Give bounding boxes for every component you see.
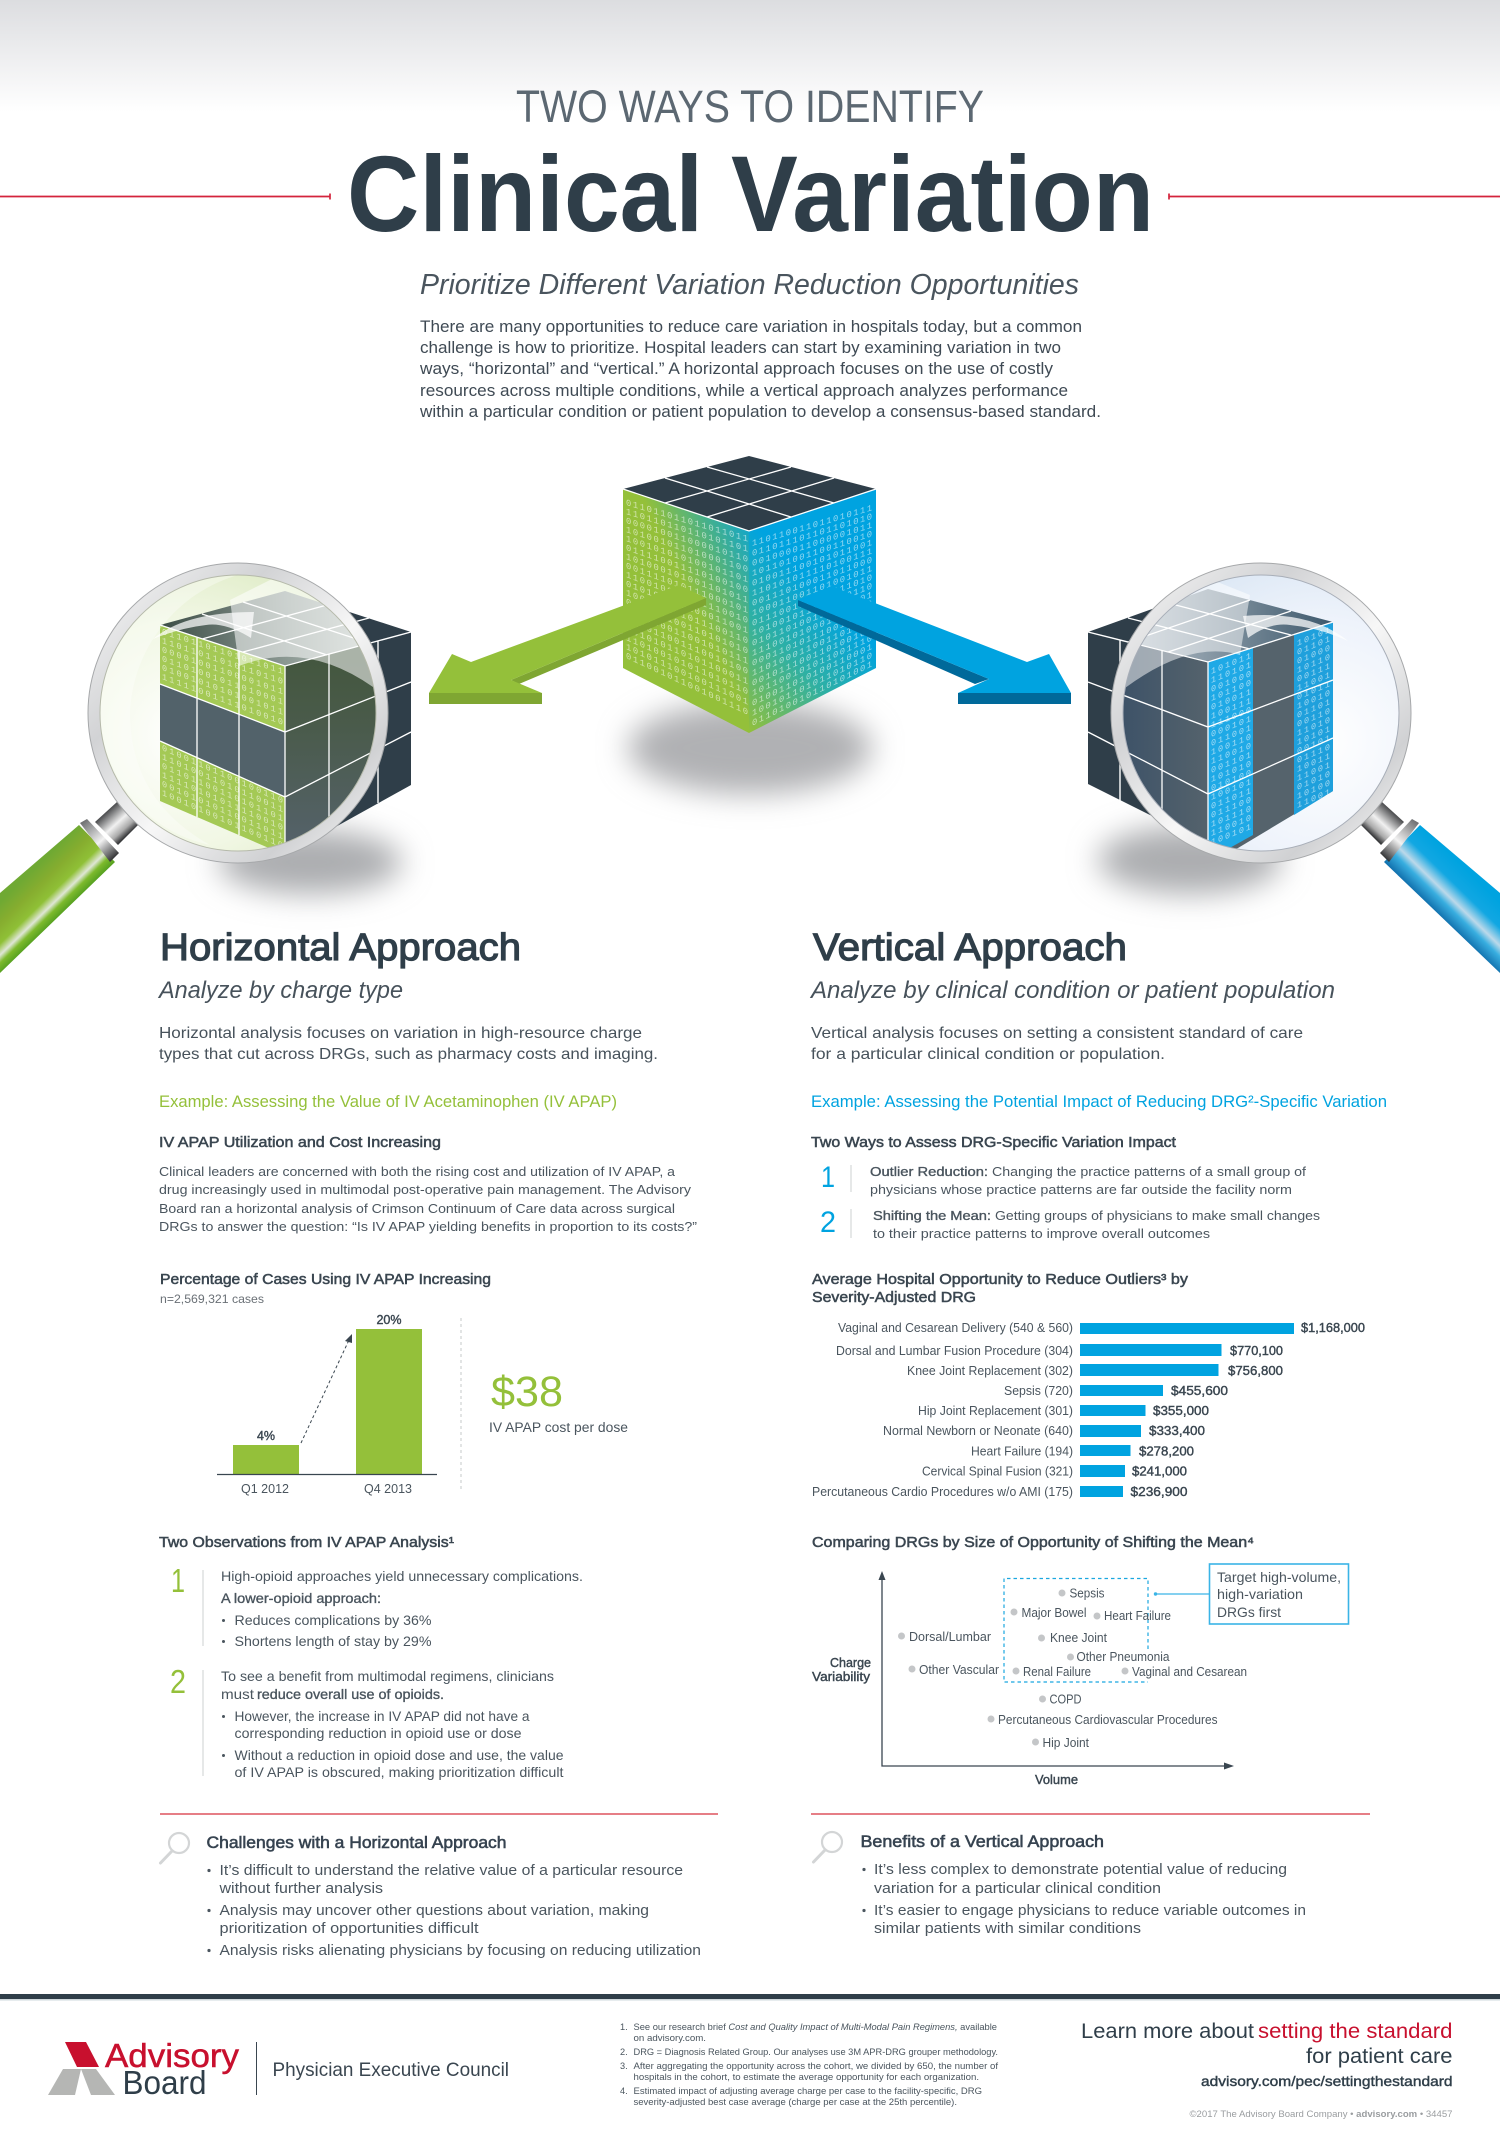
- footnotes: DRG = Diagnosis Related Group. Our analyses use 3M APR-DRG grouper methodology.: [634, 2047, 998, 2057]
- bar row 4: [1004, 1384, 1228, 1398]
- intro paragraph: ways, “horizontal” and “vertical.” A horizontal approach focuses on the use of costly: [419, 360, 1054, 378]
- binary digits strip one: 100101: [1211, 822, 1251, 848]
- description: [811, 1025, 1303, 1063]
- binary digits strip two: 01101: [1297, 697, 1330, 721]
- binary digits left face: 011001011001001110: [626, 650, 748, 718]
- top background gradient: [0, 0, 1500, 112]
- binary digits strip two: 10010: [1297, 688, 1330, 712]
- binary digits top band: 01101001011010001: [162, 654, 283, 707]
- way 1: outlier reduction: physicians whose practice patterns are far outside the facility norm: [870, 1182, 1292, 1197]
- callout connector: [1154, 1592, 1209, 1596]
- observations heading: Two Observations from IV APAP Analysis¹: [159, 1535, 454, 1551]
- intro subtitle: Prioritize Different Variation Reduction Opportunities: [420, 269, 1079, 301]
- footnotes: 1.: [620, 2022, 628, 2032]
- bar row 4: $455,600: [1171, 1384, 1228, 1398]
- binary digits right face: 001110100011011000: [752, 554, 872, 609]
- stat: cost per dose: [489, 1368, 628, 1435]
- scatter labels: Percutaneous Cardiovascular Procedures: [998, 1713, 1218, 1727]
- intro paragraph: resources across multiple conditions, while a vertical approach analyzes performance: [420, 382, 1068, 400]
- binary digits strip two: 01011: [1297, 679, 1330, 703]
- scatter points: [898, 1590, 1128, 1746]
- bar row 9: Percutaneous Cardio Procedures w/o AMI (175): [812, 1485, 1073, 1499]
- bar row 4: Sepsis (720): [1004, 1384, 1073, 1398]
- binary digits strip one: 001101: [1211, 750, 1251, 776]
- lens glare swoosh: [1243, 615, 1348, 641]
- dark cube behind lens: [1088, 589, 1333, 844]
- binary digits top band: 01101101101011011: [162, 627, 283, 677]
- bar row 5: [918, 1404, 1209, 1418]
- scatter labels: Renal Failure: [1023, 1665, 1091, 1679]
- binary digits strip one: 011011: [1211, 786, 1251, 812]
- binary digits right face: 100101101011010110: [752, 650, 872, 719]
- scatter labels: Dorsal/Lumbar: [909, 1630, 991, 1644]
- binary digits bottom band: 01001101100100110: [162, 743, 283, 806]
- binary digits right face: 110100011001101010: [752, 615, 872, 679]
- binary digits strip two: 00101: [1297, 733, 1330, 757]
- panel: vertical approach: [809, 927, 1387, 1787]
- callout box: Target high-volume,: [1217, 1569, 1341, 1585]
- bar row 6: Normal Newborn or Neonate (640): [883, 1424, 1073, 1438]
- binary digits bottom band: 00101010110011011: [162, 779, 283, 842]
- binary digits right face: [752, 503, 873, 729]
- observation 1: High-opioid approaches yield unnecessary complications.: [221, 1568, 583, 1584]
- binary digits left face: 011110011110100100: [626, 542, 748, 595]
- cube top face: [623, 456, 876, 531]
- benefits list: variation for a particular clinical condition: [874, 1881, 1161, 1897]
- lens glass: [1123, 575, 1399, 851]
- right shadow: [1098, 826, 1282, 894]
- scatter chart heading: Comparing DRGs by Size of Opportunity of Shifting the Mean⁴: [812, 1535, 1254, 1551]
- bar row 7: Heart Failure (194): [971, 1444, 1073, 1458]
- binary digits left face: 000010011000010110: [626, 515, 748, 565]
- binary digits strip two: [1297, 625, 1330, 811]
- title kicker: TWO WAYS TO IDENTIFY: [516, 81, 984, 132]
- panel: challenges with a horizontal approach: [160, 1814, 718, 1959]
- description: Vertical analysis focuses on setting a consistent standard of care: [811, 1025, 1303, 1042]
- lens edge glow: [100, 575, 238, 845]
- binary digits left face: [626, 498, 749, 718]
- illustration: central data cube: [623, 456, 876, 794]
- dark cube behind lens: [160, 591, 411, 855]
- observation 2: reduce overall use of opioids.: [257, 1686, 444, 1702]
- way 1: outlier reduction: 1: [821, 1161, 835, 1194]
- scatter chart: DRG opportunity: [812, 1564, 1348, 1787]
- benefits list: [862, 1862, 1306, 1937]
- binary digits right face: 001011100110100101: [752, 624, 872, 689]
- binary digits right face: 110110011011010111: [752, 503, 872, 549]
- call to action: advisory.com/pec/settingthestandard: [1201, 2073, 1452, 2089]
- binary digits strip one: 101011: [1211, 651, 1251, 677]
- magnified cube: [110, 576, 376, 848]
- binary digits strip one: 111000: [1211, 705, 1251, 731]
- icon: magnifier: [160, 1833, 189, 1863]
- bar chart: hospital opportunity: [812, 1272, 1365, 1499]
- binary digits strip two: 10100: [1297, 778, 1330, 802]
- blue strip one: [1208, 648, 1253, 860]
- subsection heading: IV APAP Utilization and Cost Increasing: [159, 1135, 441, 1151]
- bar chart: hospital opportunity: Average Hospital Opportunity to Reduce Outliers³ by: [812, 1272, 1189, 1288]
- bar chart: percentage of cases: Q1 2012: [241, 1482, 289, 1496]
- bar row 3: [907, 1364, 1283, 1378]
- bar row 8: [922, 1464, 1187, 1478]
- intro: [419, 269, 1101, 421]
- intro paragraph: There are many opportunities to reduce care variation in hospitals today, but a common: [420, 318, 1082, 336]
- binary digits bottom band: 01101100110101101: [162, 761, 283, 824]
- bar chart: percentage of cases: 4%: [257, 1429, 275, 1443]
- scatter labels: [909, 1586, 1247, 1750]
- challenges list: Analysis risks alienating physicians by focusing on reducing utilization: [220, 1943, 701, 1959]
- bar row 2: Dorsal and Lumbar Fusion Procedure (304): [836, 1344, 1073, 1358]
- way 1: outlier reduction: [821, 1161, 1306, 1197]
- binary digits strip one: 100101: [1211, 777, 1251, 803]
- binary digits strip two: 11001: [1297, 760, 1330, 784]
- call to action: [1081, 2020, 1452, 2089]
- description: for a particular clinical condition or population.: [811, 1046, 1165, 1063]
- binary digits strip two: 10011: [1297, 751, 1330, 775]
- challenges heading: Challenges with a Horizontal Approach: [206, 1834, 506, 1852]
- way 2: shifting the mean: Getting groups of physicians to make small changes: [995, 1208, 1321, 1223]
- binary digits strip two: 00110: [1297, 706, 1330, 730]
- description: Horizontal analysis focuses on variation in high-resource charge: [159, 1025, 642, 1042]
- binary digits left face: 100110101011100110: [626, 587, 748, 646]
- footnotes: hospitals in the cohort, to estimate the average opportunity for each organization.: [634, 2072, 979, 2082]
- binary digits right face: 111001010001101100: [752, 598, 872, 659]
- binary digits left face: 010101110100011001: [626, 578, 749, 636]
- bar chart: percentage of cases: Percentage of Cases Using IV APAP Increasing: [160, 1272, 491, 1288]
- scatter labels: Sepsis: [1070, 1586, 1104, 1600]
- scatter chart: DRG opportunity: Variability: [812, 1670, 871, 1684]
- binary digits strip one: 001000: [1211, 669, 1251, 695]
- way 2: shifting the mean: 2: [820, 1206, 836, 1239]
- binary digits left face: 110110110110101101: [626, 507, 748, 555]
- lens glare band: [1125, 575, 1250, 688]
- scatter chart: DRG opportunity: Volume: [1035, 1773, 1078, 1787]
- way 2: shifting the mean: to their practice patterns to improve overall outcomes: [873, 1226, 1211, 1241]
- body text: DRGs to answer the question: “Is IV APAP yielding benefits in proportion to its costs?”: [159, 1219, 697, 1234]
- binary digits strip one: 100111: [1211, 696, 1251, 722]
- description: [159, 1025, 658, 1063]
- binary digits strip two: 11001: [1297, 787, 1330, 811]
- subheading: Analyze by charge type: [157, 977, 403, 1004]
- bar chart: percentage of cases: 20%: [376, 1313, 402, 1327]
- binary digits right face: 101100101011001110: [752, 633, 872, 699]
- benefits list: similar patients with similar conditions: [874, 1921, 1141, 1937]
- benefits list: It’s less complex to demonstrate potential value of reducing: [874, 1862, 1287, 1878]
- binary digits strip one: 010011: [1211, 687, 1251, 713]
- observation 2: of IV APAP is obscured, making prioritization difficult: [234, 1764, 564, 1780]
- body text: Board ran a horizontal analysis of Crimson Continuum of Care data across surgical: [159, 1201, 675, 1216]
- binary digits strip two: 10101: [1297, 724, 1330, 748]
- binary digits right face: 010011010100110001: [752, 641, 872, 709]
- binary digits strip two: 11001: [1297, 670, 1330, 694]
- challenges list: prioritization of opportunities difficult: [220, 1921, 478, 1937]
- binary digits strip two: 00111: [1297, 661, 1330, 685]
- bar row 3: $756,800: [1228, 1364, 1283, 1378]
- observation 1: [171, 1562, 583, 1649]
- binary digits left face: 101011100100111001: [626, 641, 748, 708]
- body text: [159, 1164, 697, 1234]
- binary digits right face: 010011100101011001: [752, 537, 872, 589]
- footnotes: 2.: [620, 2047, 628, 2057]
- observation 1: A lower-opioid approach:: [221, 1590, 381, 1606]
- intro paragraph: challenge is how to prioritize. Hospital leaders can start by examining variation in two: [420, 339, 1061, 357]
- blue strip two: [1294, 622, 1333, 815]
- cube grid lines: [623, 467, 876, 531]
- binary digits strip two: 01110: [1297, 742, 1330, 766]
- way 1: outlier reduction: Changing the practice patterns of a small group of: [992, 1164, 1306, 1179]
- binary digits left face: 001111010111000101: [626, 560, 749, 616]
- bar row 2: $770,100: [1230, 1344, 1283, 1358]
- binary digits strip two: 01101: [1297, 634, 1330, 658]
- binary digits left face: 100101010100101101: [626, 533, 748, 585]
- binary digits top band: 01001010101001011: [162, 663, 283, 718]
- binary digits left face: 001010110101100011: [626, 623, 748, 687]
- logo: Advisory Board: [48, 2037, 240, 2101]
- bar row 7: $278,200: [1139, 1444, 1194, 1458]
- scatter labels: COPD: [1050, 1692, 1082, 1706]
- cube right face: [749, 489, 876, 733]
- call to action: for patient care: [1306, 2045, 1452, 2068]
- footnotes: on advisory.com.: [634, 2033, 706, 2043]
- footnotes: See our research brief Cost and Quality Impact of Multi-Modal Pain Regimens, available: [634, 2022, 997, 2032]
- title block: [0, 81, 1500, 254]
- lens rim: [94, 569, 382, 857]
- scatter labels: Knee Joint: [1050, 1631, 1108, 1645]
- green handle: [0, 825, 115, 973]
- challenges list: without further analysis: [218, 1881, 383, 1897]
- magnified cube: [1124, 582, 1346, 848]
- lens glare band: [230, 580, 373, 687]
- bar chart: percentage of cases: Q4 2013: [364, 1482, 412, 1496]
- observation 2: must: [221, 1686, 254, 1702]
- lens rim: [1117, 569, 1405, 857]
- binary digits left face: 101100011001010111: [626, 605, 748, 667]
- binary digits strip one: 110010: [1211, 741, 1251, 767]
- body text: drug increasingly used in multimodal post-operative pain management. The Advisory: [159, 1182, 692, 1197]
- binary digits left face: 110010001001110010: [626, 569, 748, 626]
- observation 2: 2: [170, 1663, 186, 1700]
- scatter chart: DRG opportunity: Charge: [830, 1656, 871, 1670]
- bar row 7: [971, 1444, 1194, 1458]
- scatter labels: Heart Failure: [1104, 1609, 1171, 1623]
- binary digits left face: 011011011011011011: [626, 498, 748, 545]
- callout box: high-variation: [1217, 1586, 1303, 1602]
- binary digits bottom band: 10010100101100110: [162, 788, 283, 851]
- way 2: shifting the mean: [820, 1206, 1321, 1241]
- binary digits right face: 100011001101001011: [752, 563, 873, 619]
- footer bar: [0, 1994, 1500, 2000]
- binary digits strip two: 10110: [1297, 652, 1330, 676]
- scatter labels: Hip Joint: [1042, 1736, 1089, 1750]
- handle neck: [95, 802, 138, 845]
- cube left face: [623, 489, 749, 733]
- divider dashed: [460, 1318, 462, 1491]
- binary digits strip one: 011001: [1211, 723, 1251, 749]
- binary digits left face: 101001011010001100: [626, 524, 748, 575]
- binary digits left face: 101000101001101011: [626, 551, 748, 606]
- heading: vertical approach: Vertical Approach: [813, 927, 1127, 969]
- footnotes: 4.: [620, 2086, 628, 2096]
- callout box: DRGs first: [1217, 1604, 1281, 1620]
- subheading: Analyze by clinical condition or patient population: [809, 977, 1335, 1004]
- callout box: [1210, 1564, 1348, 1624]
- panel: benefits of a vertical approach: [811, 1814, 1370, 1937]
- binary digits right face: 001000011000001011: [752, 520, 872, 569]
- logo: Advisory Board: Board: [122, 2064, 206, 2101]
- binary digits right face: 110101011110100111: [752, 546, 872, 599]
- logo: Advisory Board: Advisory: [105, 2037, 240, 2074]
- handle collar: [80, 819, 119, 862]
- scatter labels: Major Bowel: [1022, 1606, 1086, 1620]
- binary digits left face: 110011001110010100: [626, 614, 748, 677]
- dashed target box: [1004, 1578, 1148, 1682]
- observation 1: Shortens length of stay by 29%: [234, 1633, 432, 1649]
- observation 2: To see a benefit from multimodal regimens, clinicians: [221, 1668, 554, 1684]
- binary digits strip two: 01010: [1297, 769, 1330, 793]
- panel: horizontal approach: [157, 927, 697, 1780]
- copyright: ©2017 The Advisory Board Company • advisory.com • 34457: [1190, 2109, 1452, 2120]
- footnotes: Estimated impact of adjusting average charge per case to the facility-specific, DRG: [634, 2086, 982, 2096]
- bar row 9: $236,900: [1130, 1485, 1188, 1499]
- intro paragraph: within a particular condition or patient population to develop a consensus-based standard.: [419, 403, 1101, 421]
- binary digits strip one: 000101: [1211, 714, 1251, 740]
- footnotes: [620, 2022, 998, 2107]
- observation 2: [170, 1663, 564, 1780]
- arrow: green, pointing left: [429, 585, 706, 704]
- binary digits right face: 010110100110010101: [752, 589, 872, 649]
- body text: Clinical leaders are concerned with both the rising cost and utilization of IV APAP, a: [159, 1164, 676, 1179]
- description: types that cut across DRGs, such as pharmacy costs and imaging.: [159, 1046, 658, 1063]
- council name: Physician Executive Council: [272, 2059, 509, 2081]
- bar row 3: Knee Joint Replacement (302): [907, 1364, 1073, 1378]
- binary digits top band: 00001001100001011: [162, 645, 283, 697]
- handle neck: [1361, 802, 1404, 845]
- scatter labels: Vaginal and Cesarean: [1132, 1665, 1247, 1679]
- observation 2: However, the increase in IV APAP did not have a: [234, 1708, 530, 1724]
- call to action: Learn more about: [1081, 2020, 1254, 2043]
- illustration: left magnifier with horizontal cube: [0, 563, 411, 973]
- challenges list: It’s difficult to understand the relative value of a particular resource: [220, 1863, 683, 1879]
- bar row 1: $1,168,000: [1301, 1321, 1365, 1335]
- binary digits right face: 000110101110010011: [752, 606, 872, 669]
- binary digits bottom band: 11110101011110010: [162, 770, 283, 833]
- bar row 8: $241,000: [1132, 1464, 1187, 1478]
- left red rule: [0, 194, 330, 200]
- cube shadow: [628, 702, 872, 794]
- bar row 1: Vaginal and Cesarean Delivery (540 & 560): [838, 1321, 1073, 1335]
- bar row 6: $333,400: [1149, 1424, 1205, 1438]
- binary digits bottom band: 11010011010110011: [162, 752, 283, 815]
- scatter labels: Other Pneumonia: [1076, 1650, 1170, 1664]
- footer: [0, 1994, 1500, 2120]
- binary digits right face: 101101001100110010: [752, 528, 872, 579]
- lens glare swoosh: [153, 612, 254, 639]
- binary digits right face: 011100110010111010: [752, 572, 872, 629]
- binary digits top band: [162, 627, 283, 728]
- bar chart: percentage of cases: [160, 1272, 491, 1496]
- bar row 6: [883, 1424, 1205, 1438]
- lens glass: [100, 575, 376, 851]
- observation 2: corresponding reduction in opioid use or dose: [234, 1725, 522, 1741]
- footnotes: After aggregating the opportunity across the cohort, we divided by 650, the number of: [634, 2061, 998, 2071]
- footnotes: 3.: [620, 2061, 628, 2071]
- bar row 5: Hip Joint Replacement (301): [918, 1404, 1073, 1418]
- right red rule: [1169, 194, 1500, 200]
- observation 1: 1: [171, 1562, 185, 1599]
- bar row 2: [836, 1344, 1283, 1358]
- bar row 8: Cervical Spinal Fusion (321): [922, 1464, 1073, 1478]
- magnified grid lines: [1124, 600, 1333, 840]
- benefits list: It’s easier to engage physicians to reduce variable outcomes in: [874, 1903, 1306, 1919]
- binary digits strip one: 110101: [1211, 660, 1251, 686]
- icon: magnifier: [814, 1832, 842, 1862]
- bar row 1: [838, 1321, 1365, 1335]
- challenges list: [207, 1863, 701, 1959]
- challenges list: Analysis may uncover other questions about variation, making: [220, 1903, 649, 1919]
- intro paragraph: [419, 318, 1101, 421]
- binary digits strip one: 011100: [1211, 795, 1251, 821]
- stat: cost per dose: IV APAP cost per dose: [489, 1420, 628, 1435]
- benefits heading: Benefits of a Vertical Approach: [860, 1833, 1104, 1851]
- example heading: Example: Assessing the Potential Impact of Reducing DRG²-Specific Variation: [811, 1092, 1387, 1111]
- way 1: outlier reduction: Outlier Reduction:: [870, 1164, 988, 1179]
- binary digits right face: 011011101101101010: [752, 512, 872, 559]
- binary digits strip two: 01000: [1297, 643, 1330, 667]
- illustration: right magnifier with vertical cube: [1088, 563, 1500, 973]
- scatter labels: Other Vascular: [919, 1663, 999, 1677]
- left shadow: [218, 830, 402, 894]
- observation 1: Reduces complications by 36%: [234, 1612, 432, 1628]
- call to action: setting the standard: [1258, 2020, 1452, 2043]
- binary digits strip one: 110010: [1211, 813, 1251, 839]
- binary digits strip one: 101110: [1211, 804, 1251, 830]
- handle collar: [1380, 819, 1419, 862]
- heading: horizontal approach: Horizontal Approach: [160, 927, 521, 969]
- binary digits strip one: [1211, 651, 1251, 848]
- binary digits right face: 011010010110101001: [752, 659, 872, 729]
- binary digits left face: 011001100110101010: [626, 596, 748, 657]
- footnotes: severity-adjusted best case average (charge per case at the 25th percentile).: [634, 2097, 957, 2107]
- binary digits strip one: 010100: [1211, 768, 1251, 794]
- binary digits top band: 11011011010110110: [162, 636, 283, 687]
- way 2: shifting the mean: Shifting the Mean:: [873, 1208, 991, 1223]
- bar chart: hospital opportunity: Severity-Adjusted DRG: [812, 1290, 976, 1306]
- binary digits strip one: 101100: [1211, 678, 1251, 704]
- binary digits strip one: 101010: [1211, 759, 1251, 785]
- binary digits strip two: 11010: [1297, 715, 1330, 739]
- blue handle: [1384, 825, 1500, 973]
- example heading: Example: Assessing the Value of IV Acetaminophen (IV APAP): [159, 1092, 617, 1111]
- binary digits right face: 101001011101000110: [752, 581, 872, 639]
- observation 2: Without a reduction in opioid dose and use, the value: [234, 1747, 564, 1763]
- bar row 5: $355,000: [1153, 1404, 1209, 1418]
- main title: Clinical Variation: [347, 133, 1154, 254]
- subsection heading: Two Ways to Assess DRG-Specific Variation Impact: [811, 1135, 1176, 1151]
- binary digits strip two: 10101: [1297, 625, 1330, 649]
- binary digits left face: 110100101011010110: [626, 632, 748, 697]
- binary digits strip one: 100110: [1211, 732, 1251, 758]
- stat: cost per dose: $38: [491, 1368, 563, 1416]
- arrow: blue, pointing right: [798, 586, 1071, 704]
- binary digits top band: 11111001111010010: [162, 672, 283, 728]
- binary digits bottom band: [162, 743, 283, 851]
- bar chart: percentage of cases: n=2,569,321 cases: [160, 1292, 264, 1306]
- magnified grid lines: [160, 602, 374, 842]
